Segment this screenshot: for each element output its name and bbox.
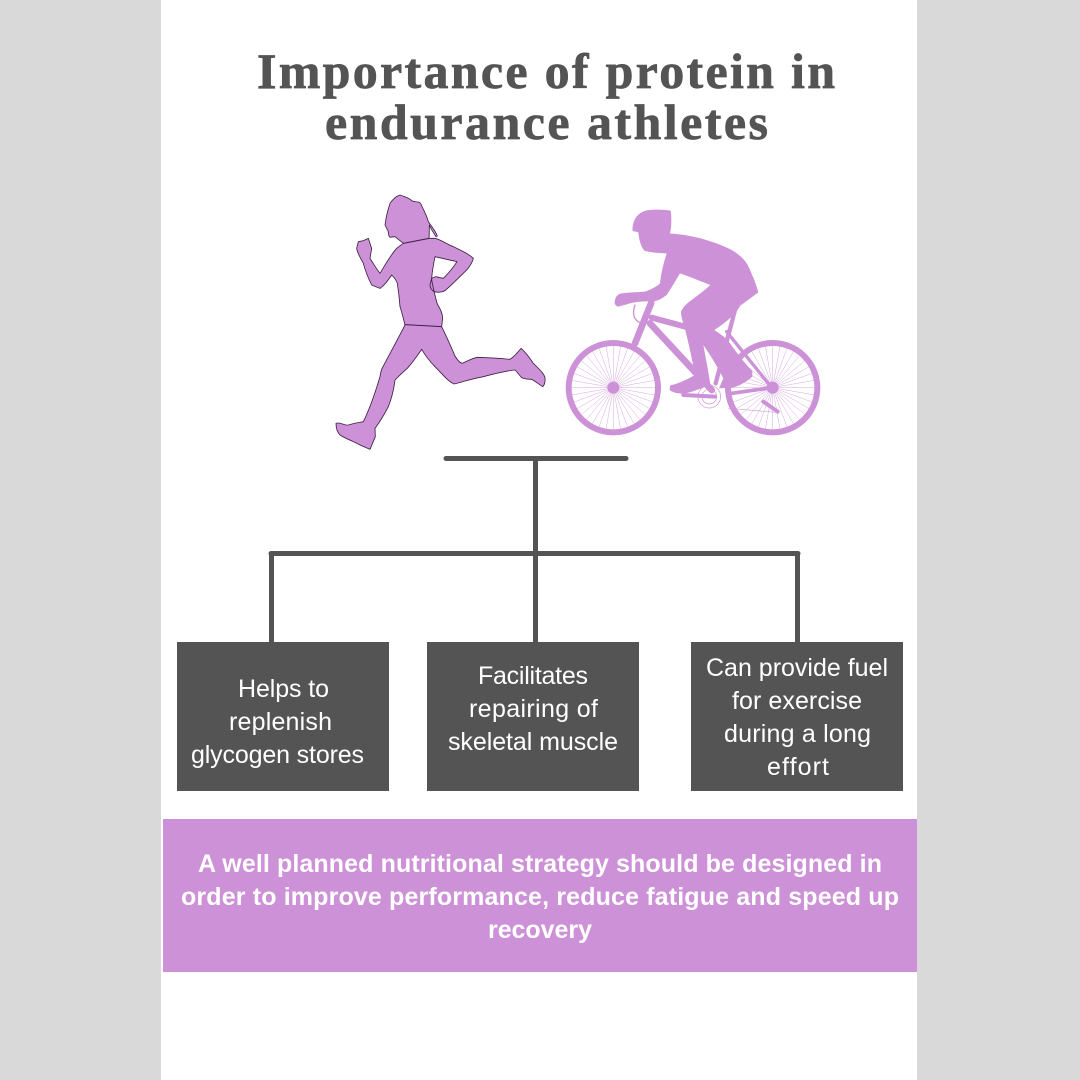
callout: nutritional strategy band: order to improve performance, reduce fatigue and speed up	[181, 883, 899, 911]
box: glycogen: glycogen stores	[191, 741, 364, 769]
box: muscle repair: skeletal muscle	[448, 728, 618, 756]
front wheel	[569, 343, 658, 432]
box: muscle repair: Facilitates	[478, 662, 588, 690]
rear wheel	[728, 343, 817, 432]
title: Importance of protein in	[257, 43, 835, 99]
icon: cyclist silhouette	[569, 210, 817, 432]
callout: nutritional strategy band: A well planned nutritional strategy should be designed in	[198, 850, 882, 878]
box: glycogen: replenish	[229, 708, 332, 736]
box: fuel: during a long	[724, 720, 871, 748]
box: fuel: for exercise	[732, 687, 862, 715]
box: glycogen	[177, 642, 389, 791]
icon: female runner silhouette	[336, 195, 545, 449]
callout: nutritional strategy band: recovery	[488, 916, 592, 944]
box: glycogen: Helps to	[238, 675, 329, 703]
title	[257, 43, 835, 150]
tree connector lines	[271, 458, 798, 642]
title: endurance athletes	[325, 94, 768, 150]
box: fuel	[691, 642, 903, 791]
rider body	[615, 210, 758, 394]
callout: nutritional strategy band	[163, 819, 917, 972]
box: fuel: Can provide fuel	[706, 654, 888, 682]
box: fuel: effort	[767, 753, 829, 781]
bicycle frame	[634, 303, 778, 412]
box: muscle repair	[427, 642, 639, 791]
box: muscle repair: repairing of	[469, 695, 598, 723]
